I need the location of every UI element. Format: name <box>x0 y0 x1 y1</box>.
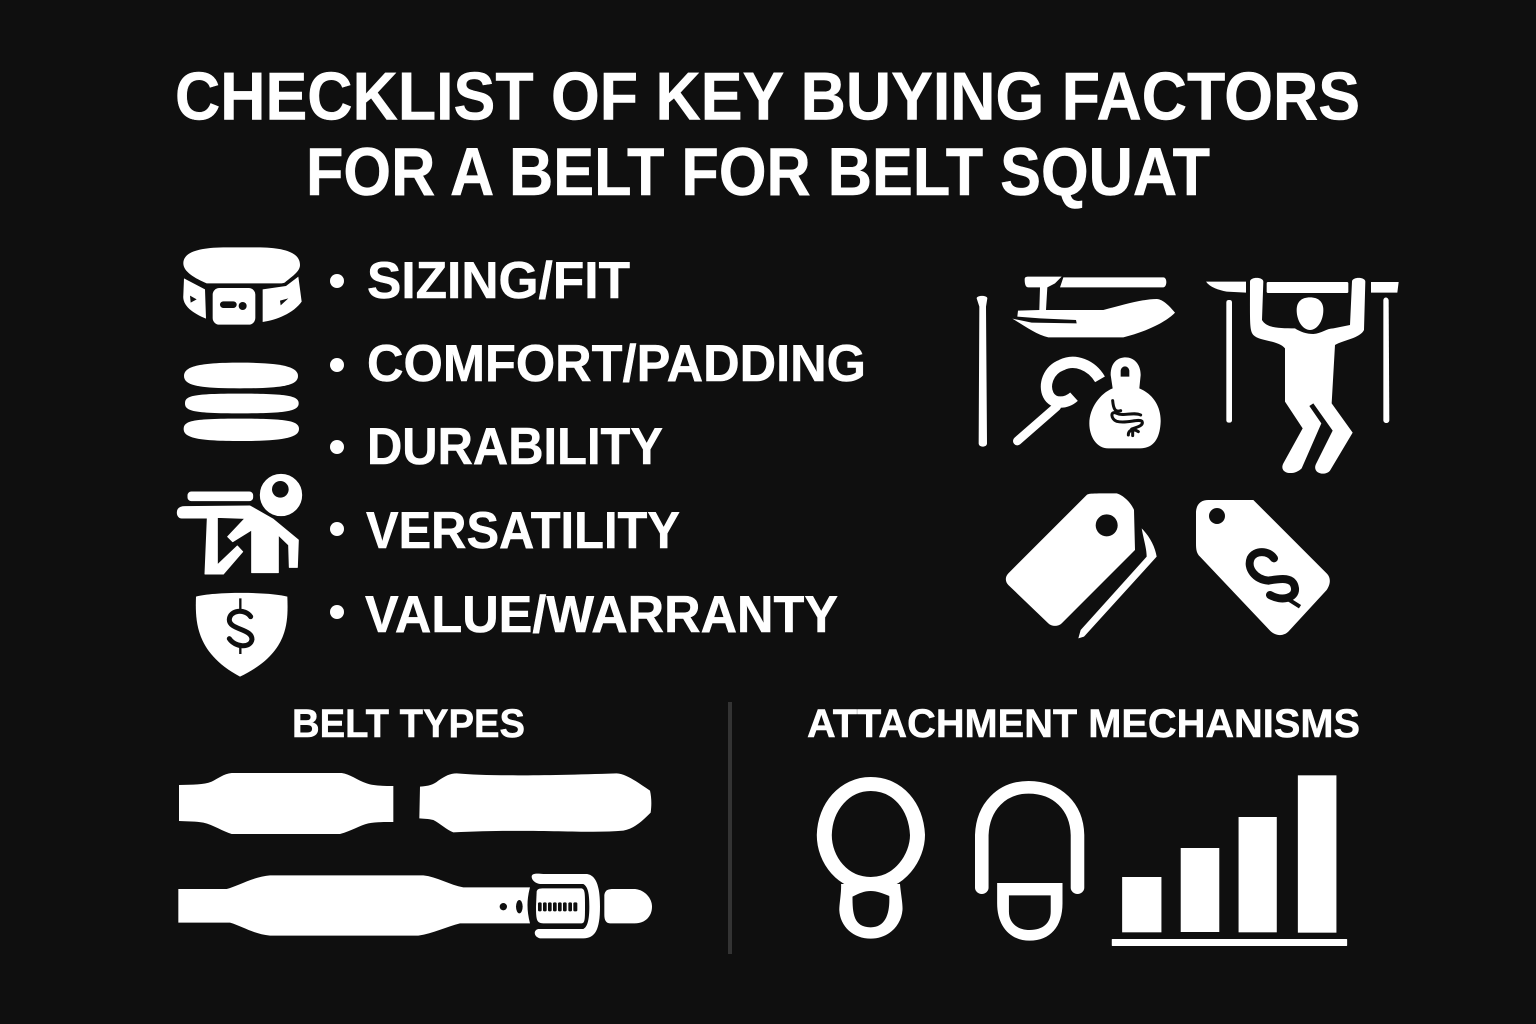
panel: checklist <box>177 247 866 677</box>
heading: attachment mechanisms: ATTACHMENT MECHANISMS <box>807 702 1360 746</box>
icon: padding layers <box>184 363 299 441</box>
item: sizing: SIZING/FIT <box>367 252 630 310</box>
vertical divider <box>728 702 732 954</box>
icon: open shackle with D-ring <box>982 787 1077 941</box>
item: durability: DURABILITY <box>367 418 663 476</box>
heading: belt types: BELT TYPES <box>292 702 525 746</box>
title: CHECKLIST OF KEY BUYING FACTORS <box>175 58 1360 134</box>
panel: attachment mechanisms <box>824 775 1347 946</box>
icon: tapered belt <box>419 773 651 832</box>
title: FOR A BELT FOR BELT SQUAT <box>306 134 1210 210</box>
icon: rising bars <box>1112 775 1347 946</box>
item: versatility: VERSATILITY <box>366 502 680 560</box>
icon: long belt with buckle <box>178 874 652 938</box>
icon: dollar price tag <box>1196 500 1330 635</box>
icon: versatility figure <box>177 474 302 574</box>
panel: belt types <box>178 773 652 938</box>
icon: value shield <box>196 593 288 677</box>
item: value: VALUE/WARRANTY <box>365 586 838 644</box>
bullet list <box>330 252 866 644</box>
icon: contoured belt <box>179 773 393 834</box>
item: comfort: COMFORT/PADDING <box>367 335 866 393</box>
icon: double ring <box>824 784 917 939</box>
icon: belt for sizing <box>183 247 302 325</box>
icon: belt squat machine with hook and weight <box>977 277 1175 448</box>
icon: figure hanging from bar <box>1206 278 1399 474</box>
icon: blank price tag <box>1006 493 1157 638</box>
title <box>175 58 1360 210</box>
